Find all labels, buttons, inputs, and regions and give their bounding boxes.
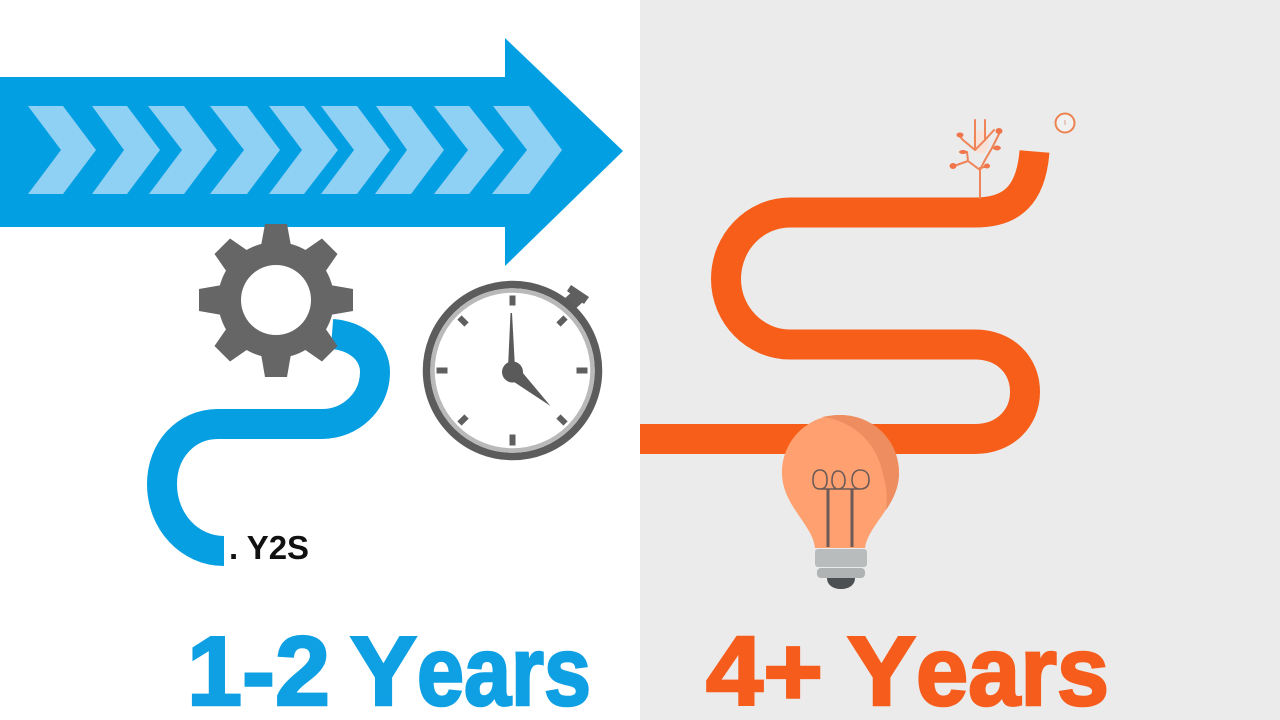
icon: stopwatch bbox=[426, 284, 598, 456]
tree trunk and branches bbox=[954, 120, 1000, 198]
stopwatch hands bbox=[502, 313, 550, 406]
heading: 4+ Years bbox=[706, 616, 1109, 720]
bulb contact bbox=[827, 578, 855, 589]
panel: right background bbox=[640, 0, 1280, 720]
icon: small tree bbox=[950, 120, 1002, 198]
stopwatch crown bbox=[563, 285, 589, 312]
icon: light bulb bbox=[782, 415, 899, 589]
tree crown highlight bbox=[973, 130, 989, 154]
bulb screw base bbox=[815, 549, 867, 567]
icon: large blue chevron arrow bbox=[0, 38, 623, 266]
bulb glass bbox=[782, 415, 899, 548]
arrow body bbox=[0, 38, 623, 266]
tree leaves bbox=[950, 128, 1002, 169]
stopwatch dial bbox=[426, 284, 598, 456]
orange winding path bbox=[640, 152, 1034, 439]
panel: left background bbox=[0, 0, 640, 720]
blue winding path bbox=[162, 334, 375, 551]
small label: Y2S: . Y2S bbox=[229, 529, 309, 566]
bulb filament bbox=[813, 470, 869, 547]
hour ticks bbox=[436, 296, 588, 446]
icon: small circle bbox=[1056, 114, 1074, 132]
bulb shading bbox=[822, 415, 899, 510]
heading: 1-2 Years bbox=[187, 616, 591, 720]
icon: gear bbox=[199, 224, 353, 377]
chevron row bbox=[28, 106, 562, 194]
